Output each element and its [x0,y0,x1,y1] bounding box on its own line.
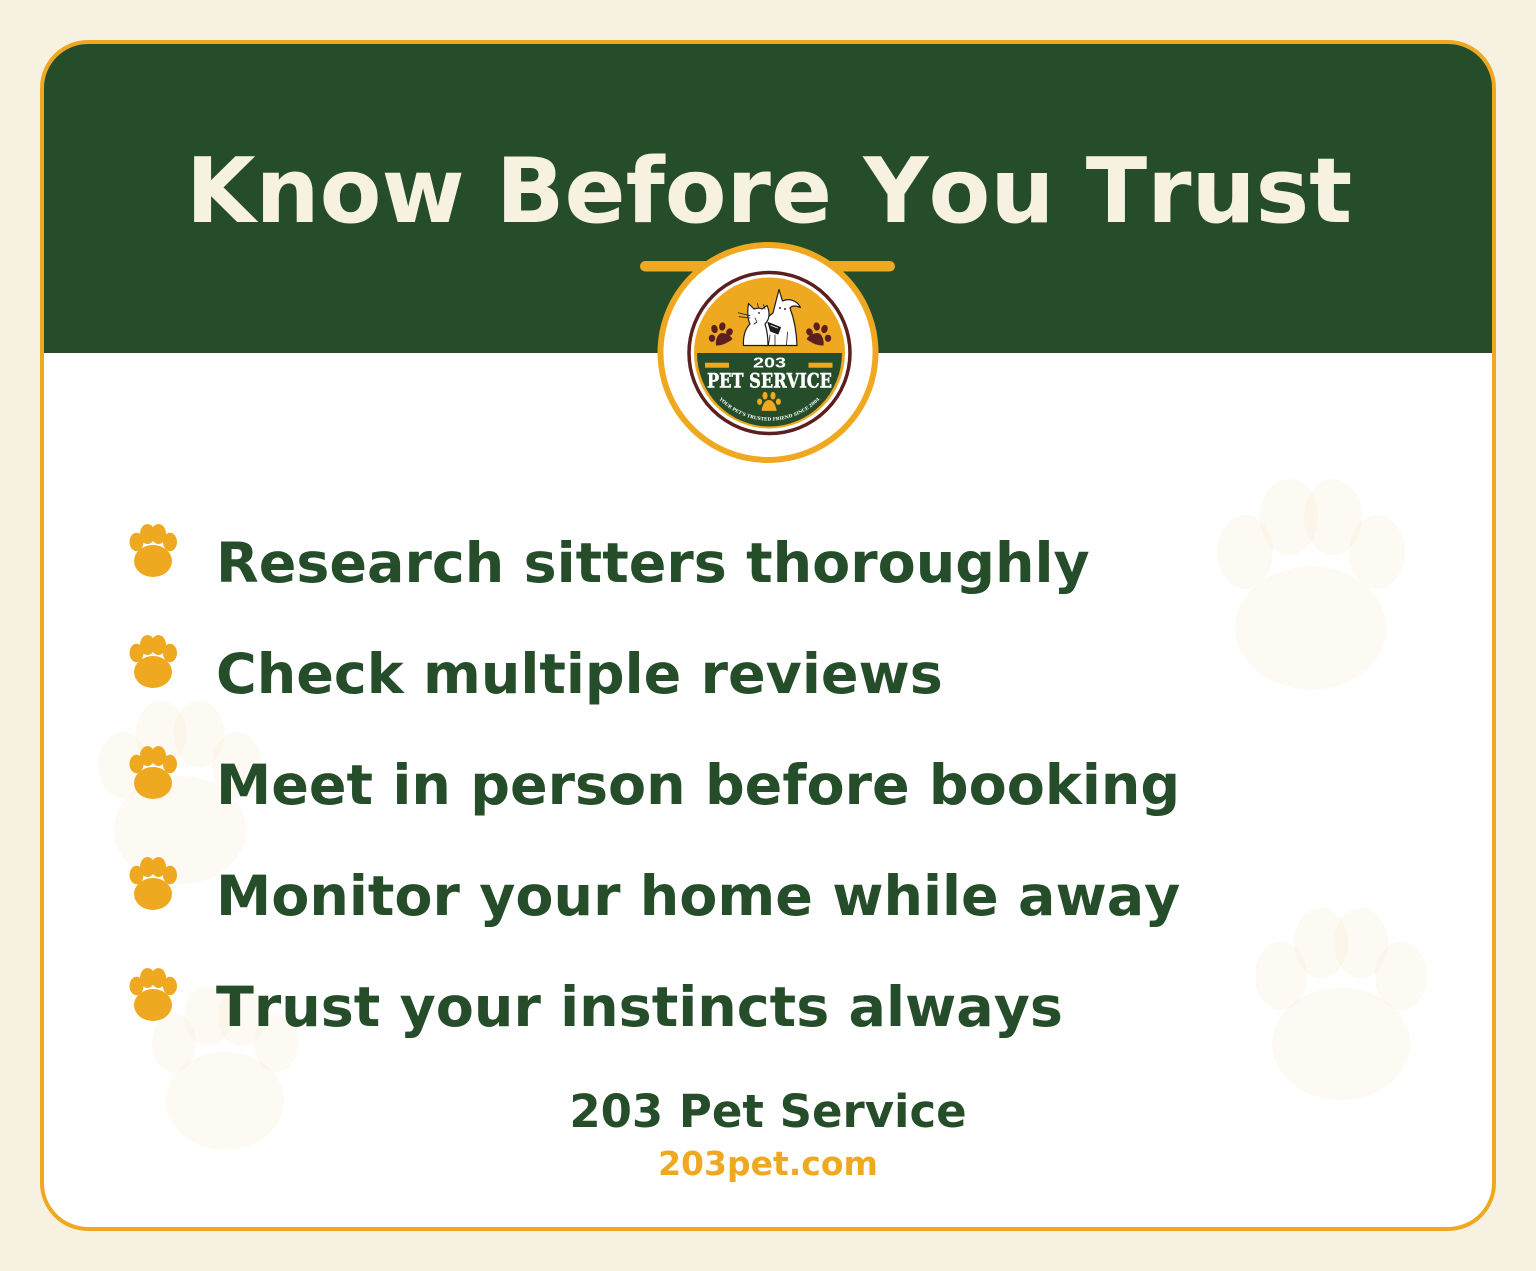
icon: cat and dog [738,290,800,346]
watermark paw: middle left [98,701,262,884]
item text 5: Trust your instincts always [216,975,1063,1040]
footer website: 203pet.com [658,1144,878,1183]
watermark paw: bottom right [1255,908,1427,1100]
badge outer ring [660,245,876,460]
icon: paw bullet 5 [130,968,177,1021]
list item: monitor home [130,857,1180,929]
item text 1: Research sitters thoroughly [216,531,1090,596]
header band [42,42,1494,353]
logo text: pet service: PET SERVICE [707,368,832,392]
item text 2: Check multiple reviews [216,642,943,707]
title underline [640,261,895,272]
logo gold disc [694,278,845,428]
icon: gold logo paw [757,392,781,411]
item text 3: Meet in person before booking [216,753,1180,818]
list item: trust instincts [130,968,1063,1040]
icon: paw bullet 1 [130,524,177,577]
logo text: tagline: YOUR PET'S TRUSTED FRIEND SINCE 2004 [720,397,820,421]
logo badge [658,242,878,463]
logo maroon ring [689,272,850,434]
logo green lower section [697,353,842,426]
title: Know Before You Trust [186,139,1352,244]
watermark paw: bottom left [152,986,298,1150]
list item: meet in person [130,746,1180,818]
footer brand name: 203 Pet Service [569,1085,967,1138]
icon: paw bullet 2 [130,635,177,688]
item text 4: Monitor your home while away [216,864,1180,929]
list item: check reviews [130,635,943,707]
logo text: 203: 203 [753,354,786,372]
icon: paw bullet 4 [130,857,177,910]
logo gold bars [705,363,832,368]
icon: maroon paw right [805,322,831,346]
list item: research sitters [130,524,1090,596]
icon: paw bullet 3 [130,746,177,799]
icon: maroon paw left [709,322,734,346]
watermark paw: top right [1217,479,1405,690]
